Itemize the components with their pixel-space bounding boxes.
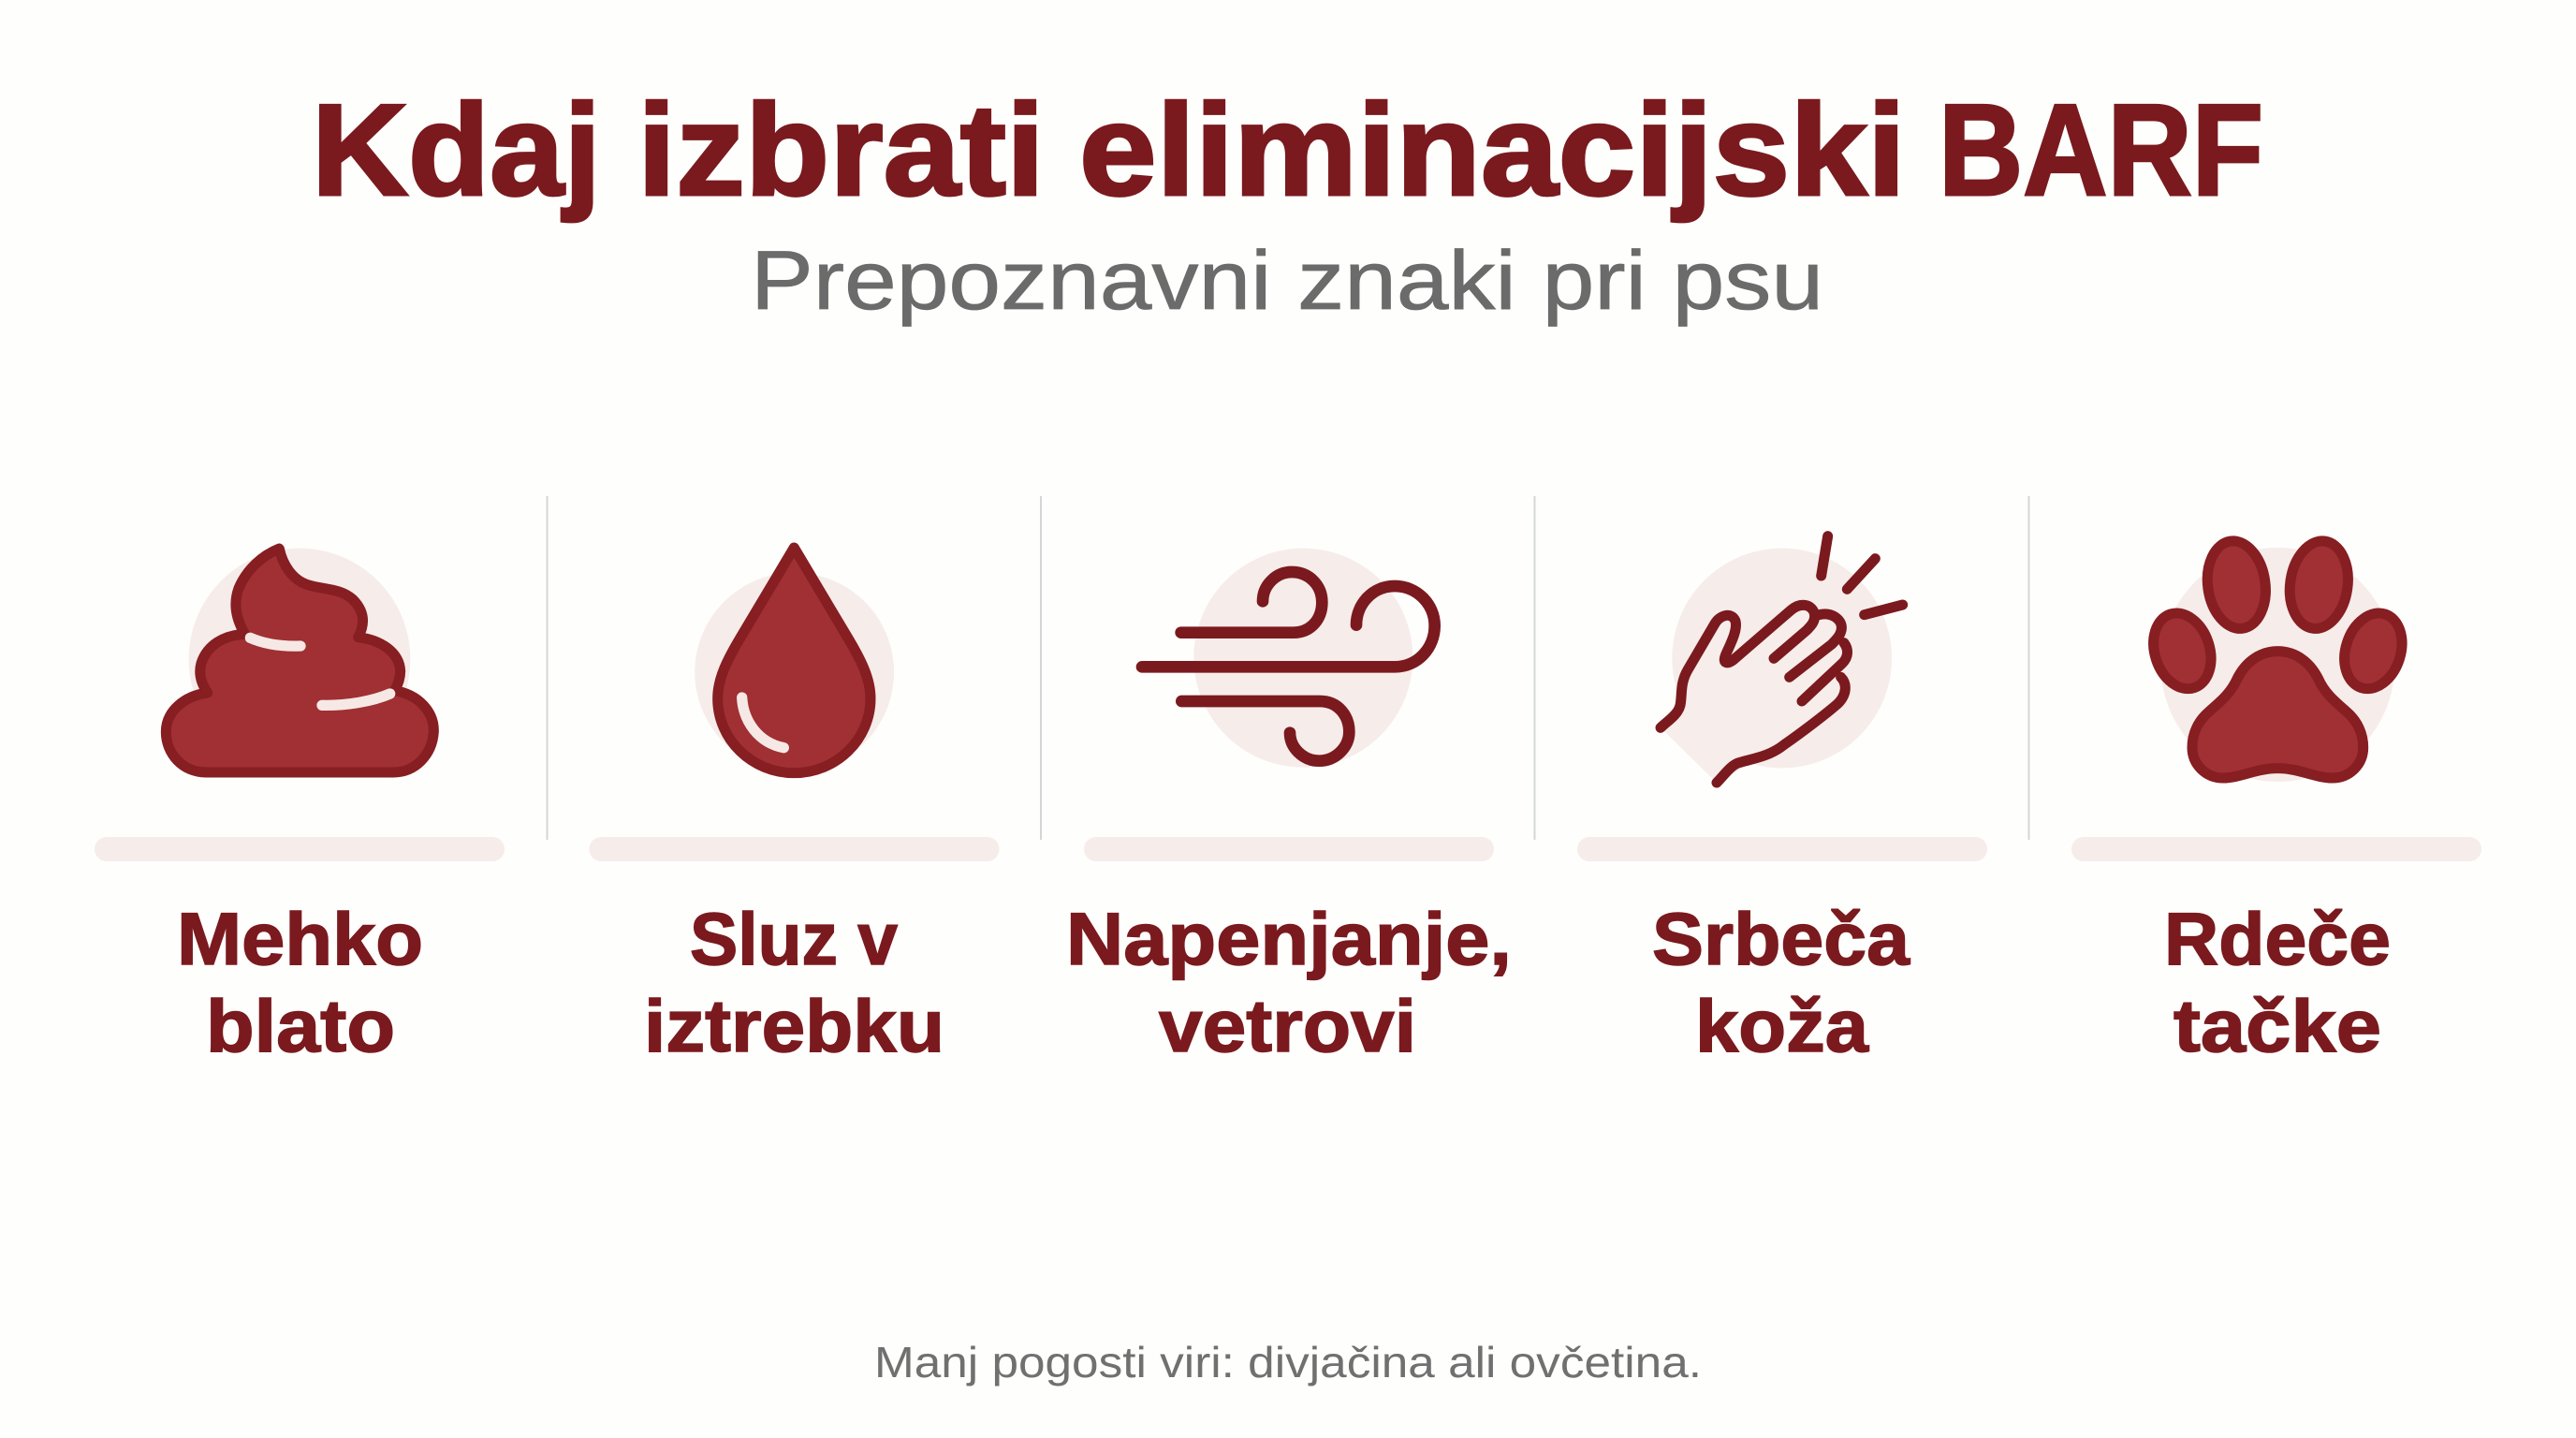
label: Mehko (177, 897, 423, 980)
highlight bar (1577, 837, 1987, 861)
highlight bar (1084, 837, 1494, 861)
label: tačke (2174, 984, 2381, 1067)
icon: drop (695, 548, 894, 773)
label (177, 897, 423, 1067)
label (1652, 897, 1910, 1067)
title (312, 78, 2263, 223)
title: BARF (1939, 78, 2263, 223)
highlight bar (590, 837, 1000, 861)
label: iztrebku (644, 984, 944, 1067)
icon: paw (2144, 537, 2411, 782)
panel: mehko blato (95, 549, 505, 1067)
label: vetrovi (1159, 984, 1416, 1067)
label: Sluz v (690, 897, 898, 980)
label: Napenjanje, (1066, 897, 1512, 980)
title: izbrati (637, 78, 1045, 223)
title: Kdaj (312, 78, 601, 223)
label: koža (1695, 984, 1869, 1067)
label: blato (206, 984, 395, 1067)
icon: scratching hand (1661, 536, 1903, 783)
label: Srbeča (1652, 897, 1910, 980)
panel: rdeče tačke (2071, 537, 2481, 1067)
panel: napenjanje, vetrovi (1066, 549, 1512, 1067)
subtitle: Prepoznavni znaki pri psu (751, 233, 1823, 327)
highlight bar (95, 837, 505, 861)
title: eliminacijski (1079, 78, 1906, 223)
panel: srbeča koža (1577, 536, 1987, 1067)
label (1066, 897, 1512, 1067)
panel: sluz v iztrebku (590, 548, 1000, 1067)
label: Rdeče (2164, 897, 2391, 980)
icon: wind (1142, 549, 1435, 768)
highlight bar (2071, 837, 2481, 861)
label (644, 897, 944, 1067)
label (2164, 897, 2391, 1067)
footer note: Manj pogosti viri: divjačina ali ovčetina. (874, 1338, 1702, 1387)
icon: stool (166, 549, 433, 772)
